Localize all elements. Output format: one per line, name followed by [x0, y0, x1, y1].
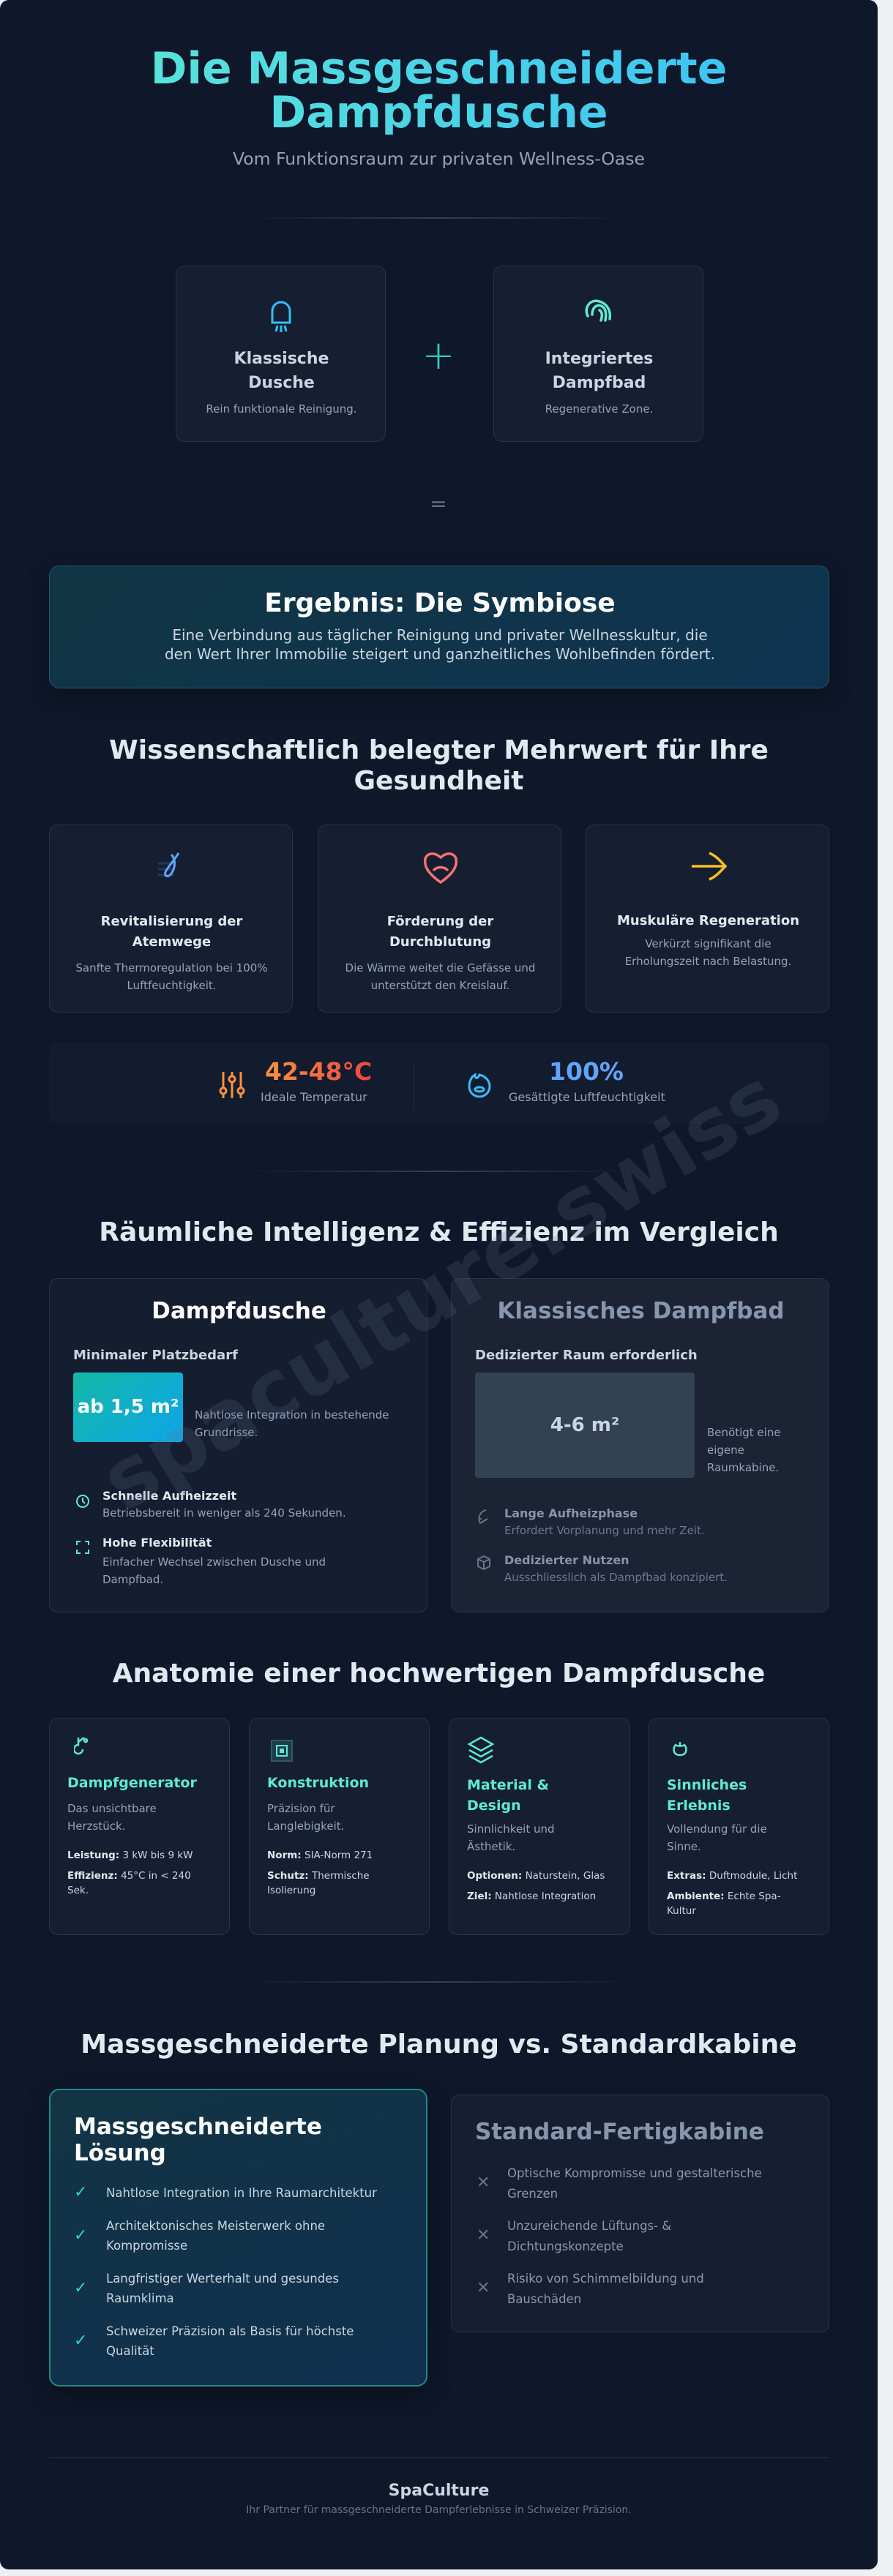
panel: Atemwege: Luftfeuchtigkeit. [127, 979, 217, 992]
list: benefits: ✓ [74, 2183, 87, 2201]
icon: generator [74, 1737, 88, 1754]
panel: Ergebnis [49, 566, 829, 688]
list: benefits: ✓ [74, 2332, 87, 2350]
list: drawbacks: ✕ [477, 2226, 490, 2245]
panel: Regeneration: Muskuläre Regeneration [617, 913, 799, 928]
panel: Klassisches Dampfbad: Dedizierter Raum erforderlich [475, 1348, 698, 1363]
panel: Ergebnis: den Wert Ihrer Immobilie steigert und ganzheitliches Wohlbefinden fördert. [165, 645, 715, 663]
heading: health: Gesundheit [354, 766, 524, 796]
panel: Ergebnis: Ergebnis: Die Symbiose [264, 588, 616, 618]
panel: Dampfdusche: Grundrisse. [195, 1426, 258, 1439]
panel: Standard-Fertigkabine [451, 2095, 829, 2332]
list: benefits: Raumklima [106, 2291, 174, 2305]
panel: Dampfgenerator [49, 1718, 230, 1935]
stat: humidity: 100% [549, 1057, 624, 1086]
list: benefits: Schweizer Präzision als Basis für höchste [106, 2324, 354, 2338]
stats band: Ideale Temperatur [261, 1090, 367, 1104]
panel: Konstruktion: Konstruktion [267, 1775, 369, 1791]
panel: Massgeschneiderte Lösung [49, 2089, 427, 2387]
panel: Atemwege [49, 825, 293, 1013]
footer [246, 2482, 632, 2516]
size box: ab 1,5 m² [78, 1396, 179, 1418]
list: drawbacks: Risiko von Schimmelbildung und [507, 2272, 704, 2286]
list: drawbacks: Dichtungskonzepte [507, 2239, 624, 2253]
panel: Klassisches Dampfbad: Erfordert Vorplanung und mehr Zeit. [504, 1524, 705, 1537]
panel: Integriertes Dampfbad: Integriertes [545, 350, 653, 368]
size box [475, 1373, 695, 1478]
list: benefits: Architektonisches Meisterwerk ohne [106, 2219, 325, 2233]
panel: Sinnliches Erlebnis: Extras: Duftmodule, Licht [667, 1870, 797, 1882]
panel: Sinnliches Erlebnis: Vollendung für die [667, 1822, 767, 1836]
list: drawbacks: Optische Kompromisse und gestalterische [507, 2166, 762, 2180]
title: Die Massgeschneiderte [151, 43, 727, 94]
icon: clock [76, 1495, 89, 1508]
list: drawbacks: Grenzen [507, 2187, 558, 2201]
icon: slow [478, 1509, 487, 1524]
panel: Sinnliches Erlebnis: Erlebnis [667, 1798, 731, 1814]
panel: Konstruktion: Schutz: Thermische Isolierung [267, 1870, 370, 1896]
panel: Dampfgenerator: Das unsichtbare [67, 1802, 157, 1815]
panel: Ergebnis: Eine Verbindung aus täglicher Reinigung und privater Wellnesskultur, die [172, 626, 708, 644]
panel: Regeneration: Verkürzt signifikant die [645, 937, 771, 950]
panel: Dampfdusche: Einfacher Wechsel zwischen Dusche und [102, 1555, 326, 1569]
icon: sliders [220, 1072, 244, 1098]
list: benefits: Langfristiger Werterhalt und gesundes [106, 2272, 339, 2286]
list: drawbacks: Bauschäden [507, 2292, 581, 2306]
icon: layers [467, 1737, 495, 1763]
icon: lungs [158, 852, 180, 878]
panel: Klassisches Dampfbad: Dedizierter Nutzen [504, 1553, 629, 1567]
list: drawbacks: ✕ [477, 2174, 490, 2192]
heading: anatomy: Anatomie einer hochwertigen Dampfdusche [113, 1659, 765, 1689]
panel: Material & Design: Material & [467, 1777, 549, 1793]
panel: Regeneration [586, 825, 829, 1013]
watermark: spaculture.swiss [86, 1050, 797, 1530]
panel: Material & Design: Design [467, 1798, 521, 1814]
heading: health: Wissenschaftlich belegter Mehrwert für Ihre [109, 735, 769, 765]
panel: Sinnliches Erlebnis [649, 1718, 829, 1935]
panel: Klassisches Dampfbad: Lange Aufheizphase [504, 1506, 638, 1520]
panel: Durchblutung: unterstützt den Kreislauf. [371, 979, 509, 992]
panel: Klassisches Dampfbad: Benötigt eine [707, 1426, 781, 1439]
panel: Dampfgenerator: Herzstück. [67, 1820, 125, 1833]
panel: Atemwege: Revitalisierung der [101, 914, 242, 929]
panel: Konstruktion [249, 1718, 430, 1935]
list: drawbacks: Unzureichende Lüftungs- & [507, 2219, 671, 2233]
panel: Dampfdusche: Minimaler Platzbedarf [73, 1348, 238, 1363]
subtitle: Vom Funktionsraum zur privaten Wellness-Oase [233, 149, 645, 169]
icon: arrow [692, 852, 728, 881]
panel: Massgeschneiderte Lösung: Lösung [74, 2140, 166, 2166]
icon: shower [271, 301, 291, 332]
panel: Klassische Dusche: Rein funktionale Reinigung. [206, 402, 357, 416]
list: drawbacks: ✕ [477, 2279, 490, 2297]
list: benefits: ✓ [74, 2279, 87, 2297]
icon: cube [477, 1555, 490, 1570]
panel: Dampfdusche: Hohe Flexibilität [102, 1536, 212, 1550]
panel: Durchblutung: Förderung der [387, 914, 493, 929]
panel: Sinnliches Erlebnis: Sinnliches [667, 1777, 747, 1793]
icon: equals: = [430, 492, 447, 516]
panel: Material & Design: Ästhetik. [467, 1840, 515, 1853]
panel: Atemwege: Sanfte Thermoregulation bei 100% [75, 961, 268, 975]
panel: Dampfdusche: Dampfdusche [152, 1298, 326, 1324]
panel: Klassisches Dampfbad: eigene [707, 1443, 744, 1457]
panel: Klassisches Dampfbad: Raumkabine. [707, 1461, 779, 1474]
list: benefits: Nahtlose Integration in Ihre Raumarchitektur [106, 2186, 377, 2200]
panel: Konstruktion: Norm: SIA-Norm 271 [267, 1850, 373, 1861]
panel: Material & Design [449, 1718, 630, 1935]
panel: Material & Design: Optionen: Naturstein, Glas [467, 1870, 605, 1882]
panel: Klassische Dusche [176, 266, 386, 442]
footer: SpaCulture [389, 2482, 489, 2500]
icon: drop [468, 1073, 490, 1097]
panel: Dampfgenerator: Dampfgenerator [67, 1775, 197, 1791]
stats band [49, 1043, 829, 1124]
panel: Durchblutung [318, 825, 561, 1013]
icon: expand [76, 1541, 89, 1554]
panel: Integriertes Dampfbad [493, 266, 703, 442]
panel: Dampfdusche: Schnelle Aufheizzeit [102, 1489, 236, 1503]
stat: temperature: 42-48°C [265, 1057, 372, 1086]
panel: Material & Design: Sinnlichkeit und [467, 1822, 555, 1836]
list: drawbacks [477, 2166, 762, 2306]
list: benefits: ✓ [74, 2226, 87, 2245]
panel: Massgeschneiderte Lösung: Massgeschneiderte [74, 2114, 322, 2140]
text: Klassische [234, 350, 329, 368]
panel: Sinnliches Erlebnis: Sinne. [667, 1840, 701, 1853]
title: Dampfdusche [269, 87, 608, 138]
heading: planning: Massgeschneiderte Planung vs. Standardkabine [81, 2029, 797, 2059]
panel: Klassisches Dampfbad: Ausschliesslich als Dampfbad konzipiert. [504, 1571, 728, 1584]
panel: Dampfgenerator: Leistung: 3 kW bis 9 kW [67, 1850, 193, 1861]
panel: Material & Design: Ziel: Nahtlose Integration [467, 1890, 596, 1902]
panel: Integriertes Dampfbad: Regenerative Zone. [545, 402, 653, 416]
title [0, 47, 878, 135]
icon: plus: + [422, 332, 455, 378]
heading: comparison: Räumliche Intelligenz & Effizienz im Vergleich [99, 1217, 779, 1247]
panel: Atemwege: Atemwege [132, 934, 211, 950]
size box [73, 1373, 183, 1442]
size box: 4-6 m² [550, 1414, 619, 1436]
panel: Dampfdusche: Betriebsbereit in weniger als 240 Sekunden. [102, 1506, 346, 1520]
footer: Ihr Partner für massgeschneiderte Dampferlebnisse in Schweizer Präzision. [246, 2504, 632, 2516]
panel: Standard-Fertigkabine: Standard-Fertigkabine [475, 2119, 764, 2145]
panel: Klassisches Dampfbad: Klassisches Dampfbad [497, 1298, 785, 1324]
icon: heart [423, 852, 458, 884]
panel: Regeneration: Erholungszeit nach Belastung. [625, 955, 791, 968]
heading: health [109, 735, 769, 796]
list: benefits: Kompromisse [106, 2239, 187, 2253]
panel: Dampfdusche: Dampfbad. [102, 1573, 163, 1586]
list: benefits [74, 2183, 377, 2358]
panel: Konstruktion: Präzision für [267, 1802, 335, 1815]
text: Dusche [248, 374, 315, 392]
panel: Sinnliches Erlebnis: Ambiente: Echte Spa-Kultur [667, 1890, 781, 1917]
icon: chip [271, 1740, 293, 1762]
panel: Klassisches Dampfbad [451, 1278, 829, 1612]
stats band: Gesättigte Luftfeuchtigkeit [509, 1090, 665, 1104]
panel: Konstruktion: Langlebigkeit. [267, 1820, 344, 1833]
icon: apple [673, 1742, 687, 1756]
panel: Dampfgenerator: Effizienz: 45°C in < 240 Sek. [67, 1870, 191, 1896]
icon: steam [586, 300, 612, 322]
panel: Integriertes Dampfbad: Dampfbad [553, 374, 646, 392]
panel: Dampfdusche: Nahtlose Integration in bestehende [195, 1408, 389, 1422]
panel: Durchblutung: Die Wärme weitet die Gefässe und [345, 961, 535, 975]
panel: Dampfdusche [49, 1278, 427, 1612]
list: benefits: Qualität [106, 2344, 154, 2358]
text [234, 350, 329, 392]
panel: Durchblutung: Durchblutung [389, 934, 491, 950]
